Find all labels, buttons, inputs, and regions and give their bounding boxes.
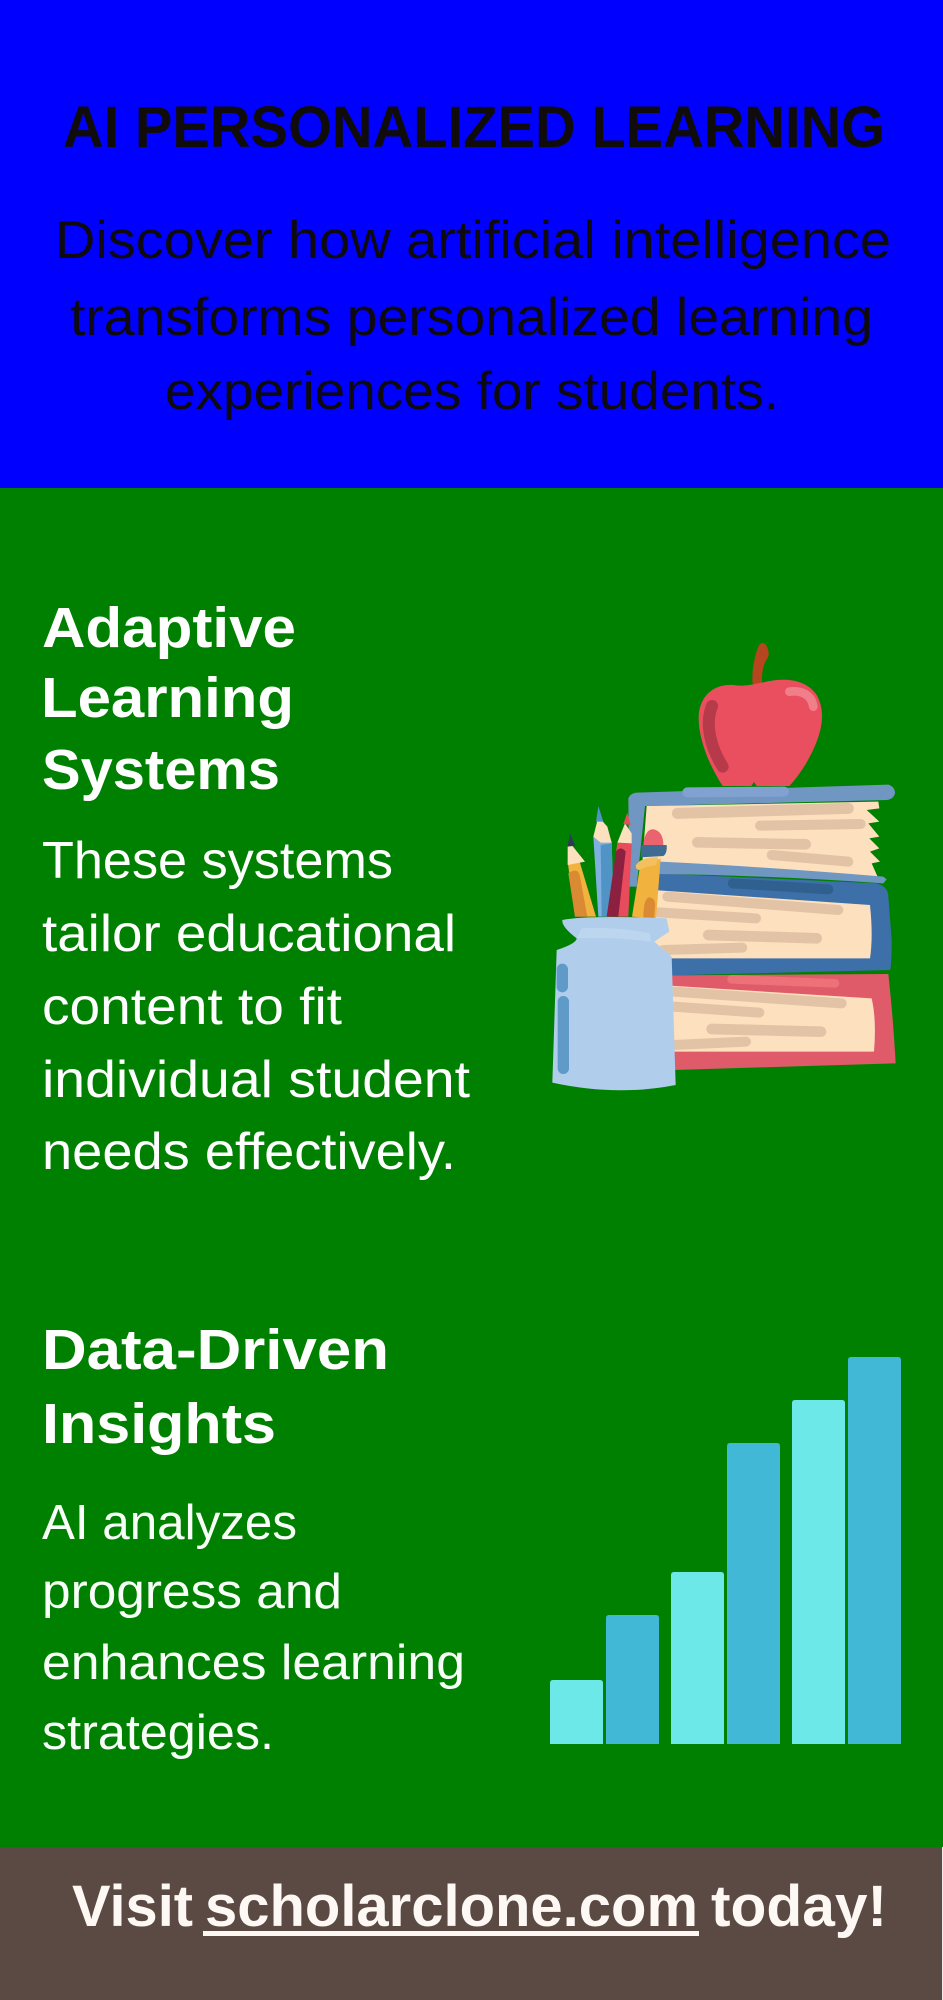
footer call to action: Visit	[72, 1874, 193, 1939]
title: AI PERSONALIZED LEARNING	[63, 95, 885, 160]
subtitle: transforms personalized learning	[70, 288, 873, 347]
subtitle: experiences for students.	[165, 362, 779, 421]
footer call to action	[72, 1874, 887, 1939]
icon: pencils	[568, 806, 667, 919]
bar chart	[550, 1357, 901, 1744]
icon: light blue book	[628, 785, 895, 887]
heading: adaptive learning systems: Learning	[41, 666, 294, 730]
text block: adaptive learning description: needs effectively.	[42, 1123, 456, 1181]
icon: apple	[699, 643, 822, 786]
heading: adaptive learning systems: Adaptive	[42, 596, 296, 660]
text block: data-driven description: strategies.	[42, 1706, 274, 1760]
text block: data-driven description: enhances learning	[42, 1636, 465, 1690]
text block: adaptive learning description: content to fit	[42, 978, 343, 1036]
icon: jar	[552, 917, 676, 1090]
panel: content background	[0, 488, 943, 1847]
icon: blue book	[653, 873, 892, 975]
icon: red book	[670, 974, 896, 1070]
text block: adaptive learning description: These systems	[42, 832, 393, 890]
icon: books, apple and pencil jar	[552, 643, 896, 1090]
text block: data-driven description	[42, 1496, 465, 1760]
footer call to action: today!	[711, 1874, 887, 1939]
text block: adaptive learning description	[42, 832, 471, 1181]
text block: data-driven description: AI analyzes	[42, 1496, 297, 1550]
heading: adaptive learning systems	[41, 596, 296, 802]
footer call to action: scholarclone.com	[205, 1874, 698, 1939]
text block: adaptive learning description: individual student	[42, 1051, 471, 1109]
subtitle	[55, 211, 891, 421]
text block: adaptive learning description: tailor educational	[42, 905, 456, 963]
heading: data-driven insights: Insights	[42, 1392, 276, 1456]
heading: data-driven insights	[42, 1318, 389, 1456]
panel: footer	[0, 1847, 943, 2000]
text block: data-driven description: progress and	[42, 1565, 342, 1619]
heading: data-driven insights: Data-Driven	[42, 1318, 389, 1382]
subtitle: Discover how artificial intelligence	[55, 211, 891, 270]
panel: header	[0, 0, 943, 488]
heading: adaptive learning systems: Systems	[42, 738, 280, 802]
